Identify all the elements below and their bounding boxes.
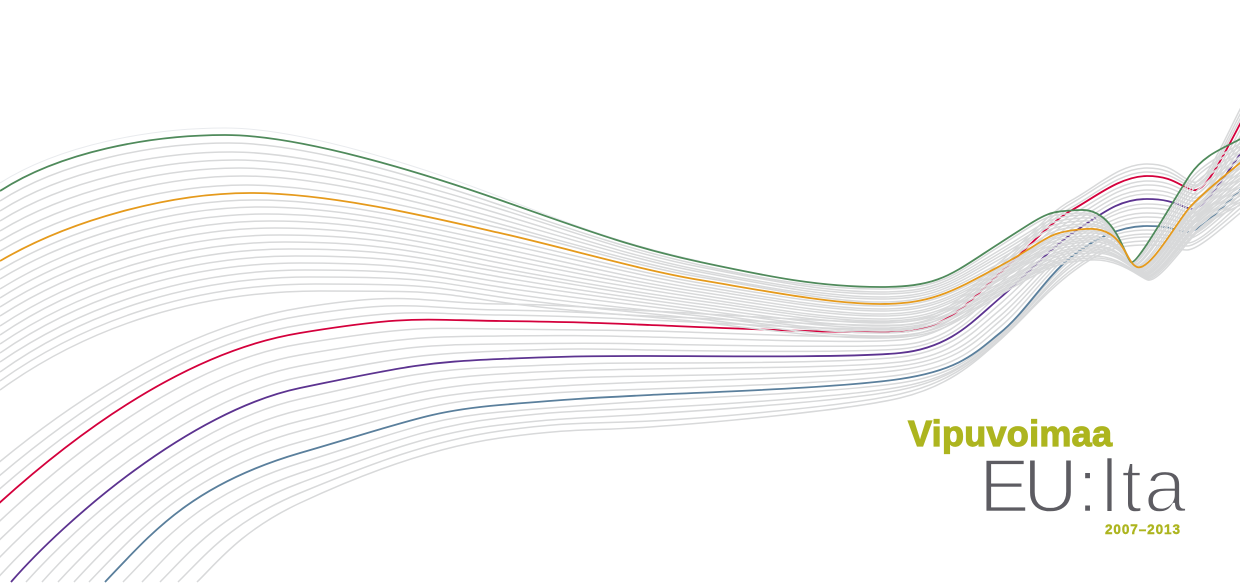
blue line [105, 180, 1240, 582]
title: EU:lta: EU:lta [979, 444, 1187, 529]
upper bundle of gray lines [0, 137, 1240, 390]
orange line [0, 155, 1240, 304]
years: 2007–2013: 2007–2013 [1105, 522, 1180, 537]
green line [0, 134, 1240, 287]
title: Vipuvoimaa: Vipuvoimaa [908, 413, 1113, 454]
faint line above green [0, 128, 700, 261]
purple line [11, 140, 1240, 582]
red line [0, 105, 1240, 550]
